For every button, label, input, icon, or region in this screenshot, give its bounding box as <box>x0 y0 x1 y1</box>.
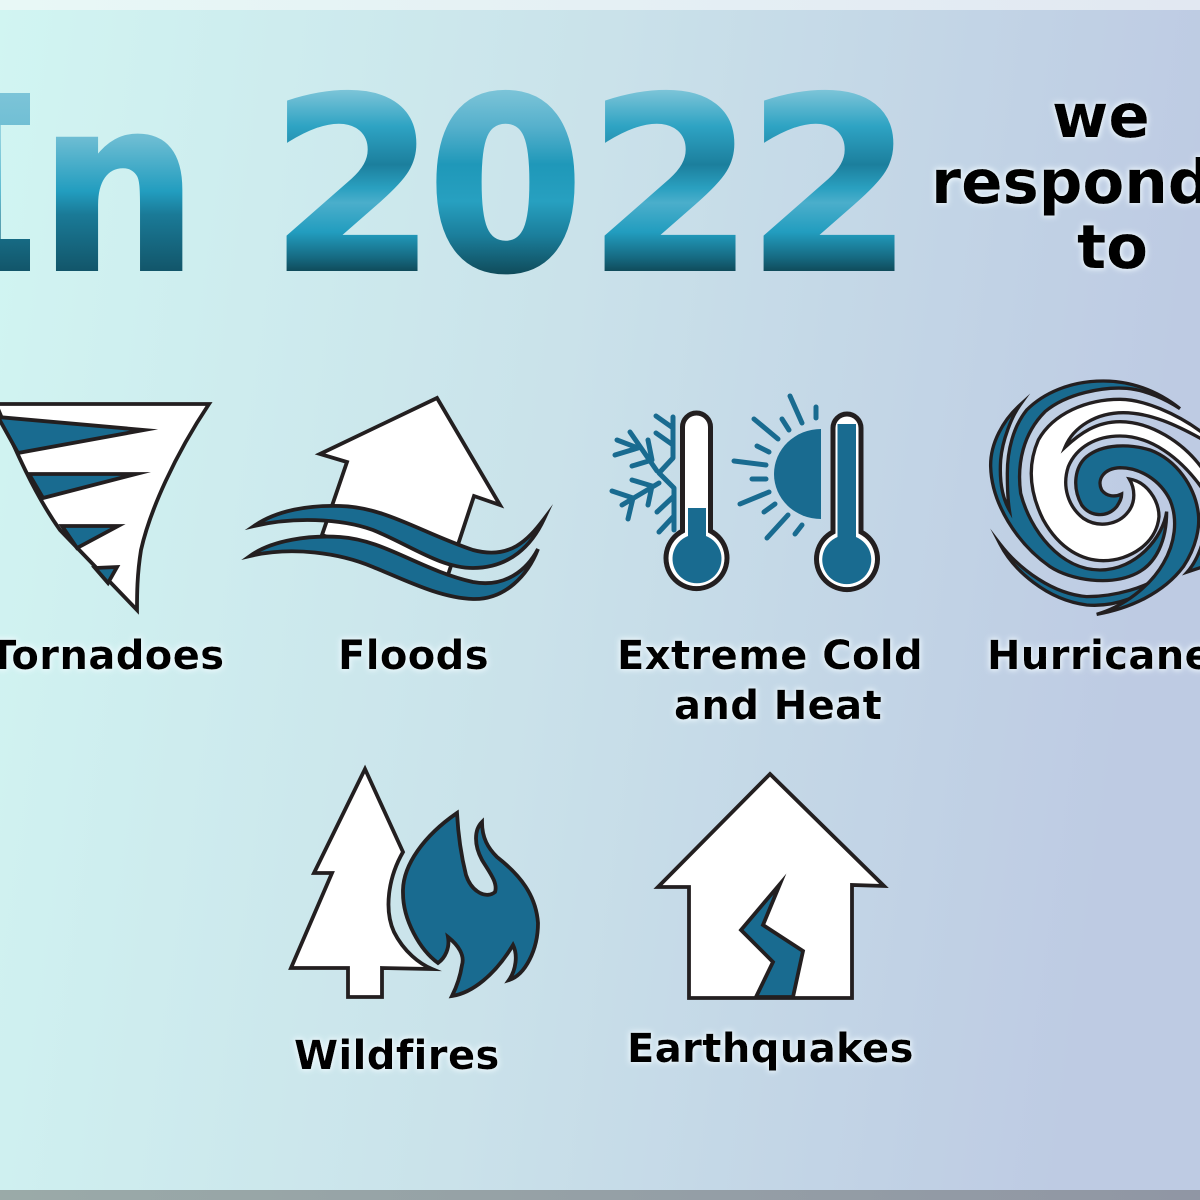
icon: tree and flame <box>291 769 538 997</box>
icon: sun <box>734 396 821 538</box>
label: Floods: Floods <box>338 633 489 679</box>
title: In 2022: 2 <box>269 46 437 326</box>
title: In 2022: 0 <box>427 46 584 326</box>
icon: tornado <box>0 404 209 610</box>
icon: flame <box>403 813 538 996</box>
icon: cracked house <box>658 774 884 998</box>
label: Earthquakes: Earthquakes <box>627 1026 914 1072</box>
title: In 2022: 2 <box>587 46 755 326</box>
label: Extreme Cold and Heat: Extreme Cold <box>617 633 923 679</box>
subtitle: we responded to: to <box>1077 212 1148 283</box>
subtitle: we responded to <box>931 81 1200 283</box>
icon: hurricane <box>991 381 1200 614</box>
subtitle: we responded to: we <box>1052 81 1150 152</box>
label: Extreme Cold and Heat: and Heat <box>674 683 882 729</box>
icon: cold thermometer <box>666 413 727 589</box>
icon: extreme cold and heat thermometers <box>612 396 877 590</box>
icon: hot thermometer <box>816 414 877 590</box>
label: Wildfires: Wildfires <box>294 1033 500 1079</box>
icon: flooded house <box>250 398 544 599</box>
title: In 2022 <box>0 46 914 326</box>
title: In 2022: n <box>38 46 198 326</box>
title: In 2022: 2 <box>746 46 914 326</box>
icon: snowflake <box>612 416 674 532</box>
label: Extreme Cold and Heat <box>617 633 923 729</box>
icon: tree <box>291 769 432 997</box>
